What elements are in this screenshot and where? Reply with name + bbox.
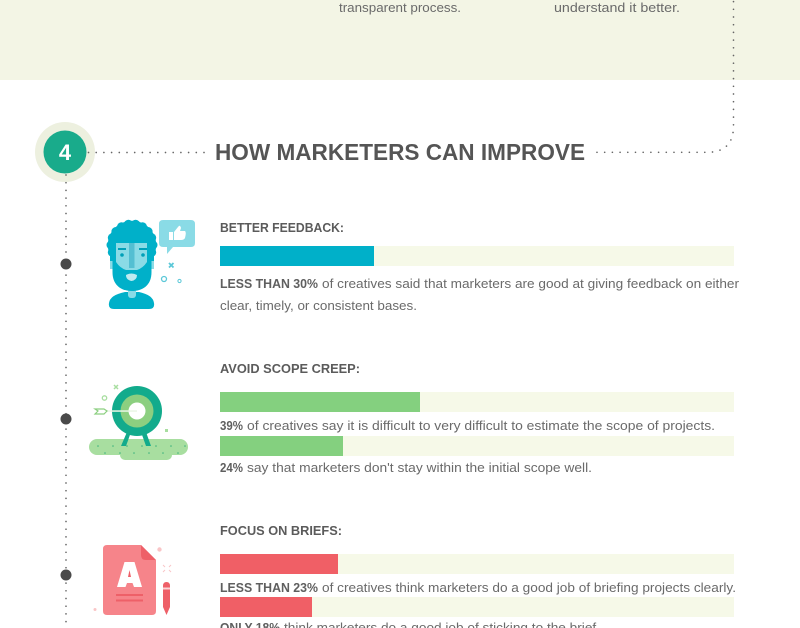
- text: stay within scope description: 24%: [220, 460, 243, 475]
- connector: vertical dotted timeline: [65, 175, 67, 628]
- heading: HOW MARKETERS CAN IMPROVE: [215, 139, 585, 165]
- timeline node 2: [60, 414, 72, 424]
- text: end of right column: understand it better.: [554, 0, 680, 15]
- panel: top section background: [0, 0, 800, 80]
- bar: stay within scope 24%: [220, 436, 734, 456]
- text: briefing clearly description: LESS THAN 23%: [220, 580, 318, 595]
- text: end of left column: transparent process.: [339, 0, 461, 15]
- icon: bearded man with thumbs up: [106, 220, 195, 309]
- text: focus on briefs heading: FOCUS ON BRIEFS:: [220, 523, 342, 538]
- text: better feedback description: [220, 276, 740, 313]
- bar: sticking to brief 18%: [220, 597, 734, 617]
- timeline node 1: [60, 258, 72, 270]
- bar: briefing clearly 23%: [220, 554, 734, 574]
- timeline node 3: [60, 570, 72, 580]
- text: stay within scope description: say that marketers don't stay within the initial scope well.: [247, 460, 592, 475]
- text: better feedback description: LESS THAN 30%: [220, 276, 318, 291]
- connector: dotted line from badge to heading: [88, 152, 206, 154]
- text: better feedback description: clear, timely, or consistent bases.: [220, 298, 417, 313]
- text: scope estimate description: 39%: [220, 418, 243, 433]
- text: better feedback heading: BETTER FEEDBACK:: [220, 220, 344, 235]
- icon: brief document and pencil: [94, 545, 171, 615]
- text: briefing clearly description: of creatives think marketers do a good job of briefing projects clearly.: [322, 580, 736, 595]
- icon: target with arrow on grass: [89, 385, 188, 460]
- bar: scope estimate 39%: [220, 392, 734, 412]
- badge: section number 4: 4: [59, 140, 72, 165]
- text: scope estimate description: of creatives say it is difficult to very difficult to estimate the scope of projects.: [247, 418, 715, 433]
- connector: dotted line into section heading from the right: [594, 2, 734, 152]
- bar: better feedback 30%: [220, 246, 734, 266]
- text: avoid scope creep heading: AVOID SCOPE CREEP:: [220, 361, 360, 376]
- text: better feedback description: of creatives said that marketers are good at giving feedback on either: [322, 276, 740, 291]
- badge: section number 4: [35, 122, 95, 182]
